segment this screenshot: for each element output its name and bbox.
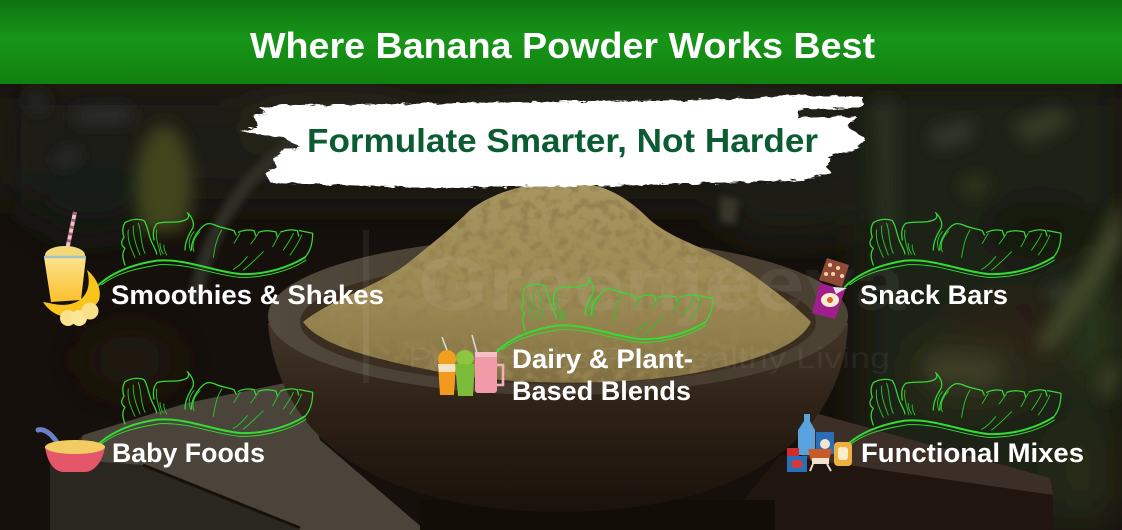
subtitle brush banner — [240, 95, 865, 188]
brush stroke — [240, 95, 865, 188]
subtitle text: Formulate Smarter, Not Harder — [307, 122, 818, 159]
leaf line art — [845, 373, 1061, 447]
item: dairy and plant-based blends — [438, 278, 713, 406]
icon: baby food bowl — [38, 430, 105, 472]
title: Where Banana Powder Works Best — [250, 25, 875, 66]
leaf line art — [497, 278, 713, 352]
label: Dairy & Plant- — [512, 344, 693, 374]
label — [512, 344, 693, 406]
wooden table planks — [50, 380, 1053, 530]
icon: snack bar — [812, 258, 849, 319]
label: Based Blends — [512, 376, 691, 406]
powder mound — [303, 183, 811, 383]
leaf line art — [97, 213, 313, 287]
watermark — [363, 230, 906, 383]
icon: smoothie with banana — [43, 212, 100, 326]
leaf line art — [97, 372, 313, 446]
icon: three drinks — [438, 335, 503, 396]
watermark: Greenjeeva — [418, 242, 906, 327]
leaf line art — [845, 213, 1061, 287]
item: smoothies and shakes — [43, 212, 384, 326]
label: Functional Mixes — [861, 438, 1084, 468]
label: Smoothies & Shakes — [111, 280, 384, 310]
bowl — [268, 183, 848, 512]
item: snack bars — [812, 213, 1061, 319]
label: Snack Bars — [860, 280, 1008, 310]
header banner — [0, 0, 1122, 84]
item: functional mixes — [787, 373, 1084, 472]
icon: packaged products — [787, 414, 852, 472]
item: baby foods — [38, 372, 313, 472]
label: Baby Foods — [112, 438, 265, 468]
watermark: Pure Herbs For Healthy Living — [408, 342, 890, 375]
